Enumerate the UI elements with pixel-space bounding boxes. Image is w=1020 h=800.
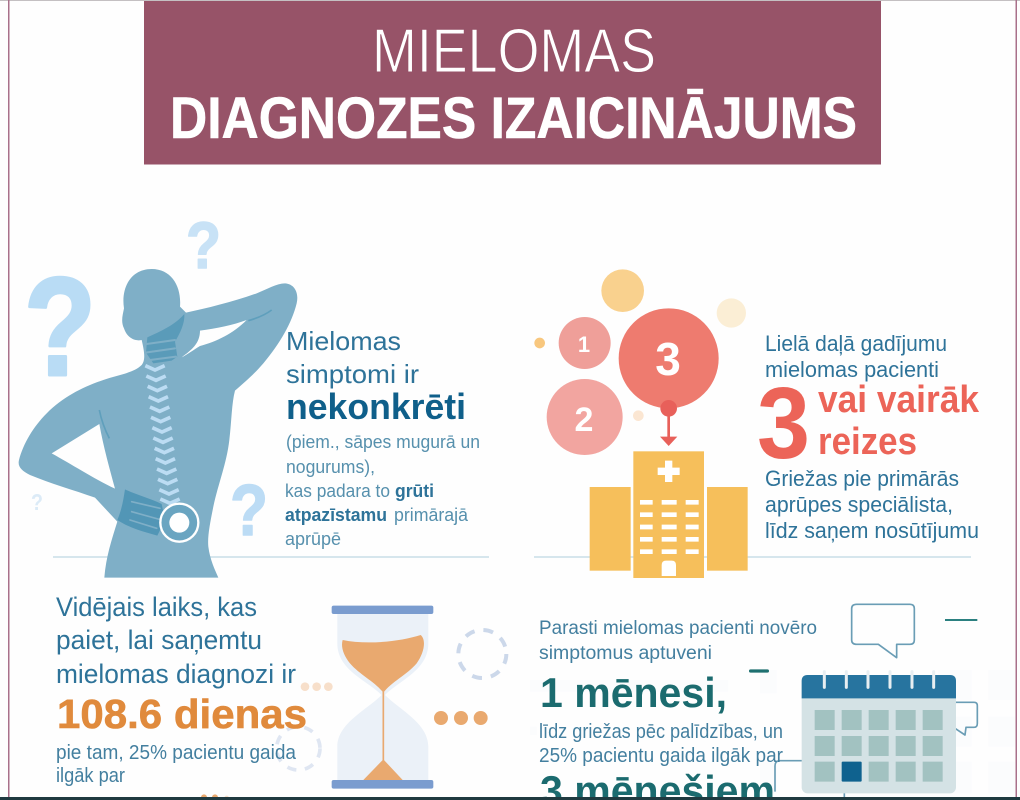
- text: three or more visits: reizes: [818, 421, 917, 463]
- text: nonspecific symptoms: primārajā: [394, 505, 469, 525]
- panel: symptom duration: [530, 604, 1015, 800]
- text: time to diagnosis: [56, 592, 307, 787]
- icon: question marks: [24, 208, 268, 551]
- icon: numbered circles and hospital: 3: [655, 333, 681, 385]
- icon: numbered circles and hospital: 1: [578, 332, 590, 357]
- text: symptom duration: Parasti mielomas pacienti novēro: [539, 618, 817, 639]
- text: nonspecific symptoms: nogurums),: [286, 457, 375, 477]
- panel: nonspecific symptoms: [19, 208, 489, 578]
- text: symptom duration: simptomus aptuveni: [539, 643, 712, 664]
- text: nonspecific symptoms: nekonkrēti: [286, 386, 466, 427]
- icon: question marks: ?: [24, 248, 96, 405]
- text: time to diagnosis: mielomas diagnozi ir: [56, 659, 296, 689]
- text: three or more visits: aprūpes speciālista,: [765, 492, 953, 517]
- icon: numbered circles and hospital: [534, 269, 748, 578]
- panel: time to diagnosis: [56, 592, 506, 800]
- icon: numbered circles and hospital: 2: [575, 401, 593, 439]
- text: nonspecific symptoms: simptomi ir: [286, 359, 419, 389]
- text: three or more visits: Lielā daļā gadījumu: [765, 331, 947, 356]
- icon: spine: [145, 366, 180, 503]
- panel: three or more visits: [534, 269, 980, 578]
- text: three or more visits: mielomas pacienti: [765, 357, 939, 382]
- text: nonspecific symptoms: (piem., sāpes mugurā un: [286, 432, 480, 452]
- text: nonspecific symptoms: atpazīstamu: [285, 505, 387, 525]
- text: nonspecific symptoms: aprūpē: [285, 529, 341, 549]
- icon: question marks: ?: [31, 489, 43, 515]
- text: symptom duration: [539, 618, 817, 800]
- text: symptom duration: 1 mēnesi,: [540, 669, 727, 716]
- text: time to diagnosis: Vidējais laiks, kas: [56, 592, 257, 622]
- text: time to diagnosis: pie tam, 25% pacientu gaida: [56, 742, 297, 764]
- text: nonspecific symptoms: kas padara to: [285, 481, 390, 501]
- title banner: [144, 1, 881, 164]
- text: three or more visits: [757, 331, 980, 543]
- icon: calendar with speech bubbles: [530, 604, 1015, 798]
- title line: MIELOMAS: MIELOMAS: [372, 17, 656, 86]
- icon: question marks: ?: [186, 208, 221, 282]
- icon: question marks: ?: [230, 471, 268, 551]
- icon: person with back pain: [19, 269, 297, 578]
- text: time to diagnosis: ilgāk par: [56, 765, 125, 787]
- text: time to diagnosis: paiet, lai saņemtu: [56, 625, 262, 655]
- text: nonspecific symptoms: Mielomas: [286, 326, 401, 356]
- text: three or more visits: vai vairāk: [818, 379, 980, 421]
- text: three or more visits: 3: [757, 368, 810, 480]
- text: three or more visits: Griežas pie primārās: [765, 466, 959, 491]
- title line: DIAGNOZES IZAICINĀJUMS: DIAGNOZES IZAICINĀJUMS: [170, 86, 857, 151]
- text: time to diagnosis: 108.6 dienas: [57, 691, 307, 737]
- text: symptom duration: 25% pacientu gaida ilgāk par: [539, 745, 783, 767]
- text: nonspecific symptoms: [285, 326, 480, 549]
- icon: hourglass with decorations: [201, 606, 506, 800]
- text: nonspecific symptoms: grūti: [395, 481, 434, 501]
- text: three or more visits: līdz saņem nosūtījumu: [765, 518, 979, 543]
- text: symptom duration: līdz griežas pēc palīdzības, un: [539, 721, 783, 743]
